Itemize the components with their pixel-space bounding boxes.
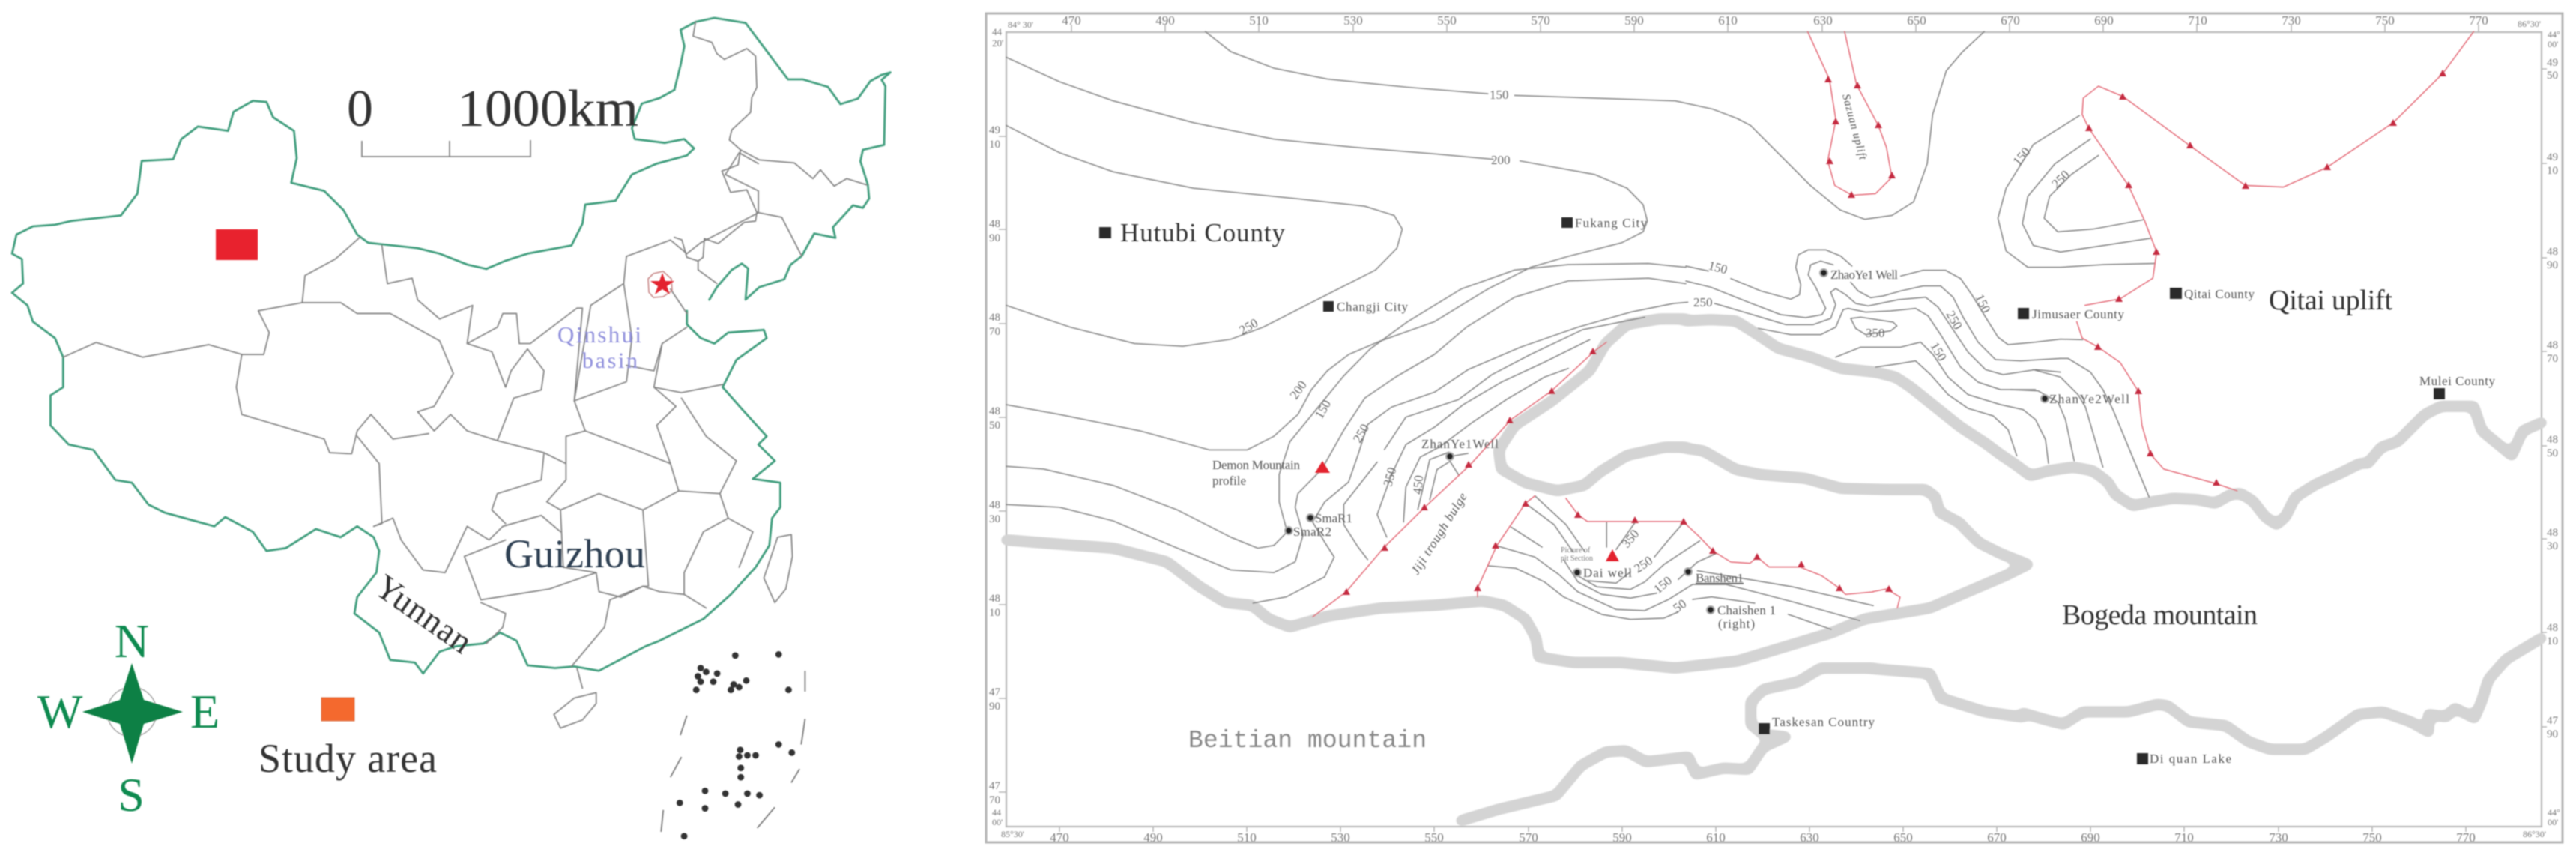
place labels: Sazuan uplift xyxy=(1839,93,1869,162)
map frame and axes: 47 xyxy=(989,686,1001,698)
place labels: Beitian mountain xyxy=(1188,727,1427,755)
map frame and axes: 750 xyxy=(2375,13,2395,28)
map frame and axes: 630 xyxy=(1800,830,1819,845)
contour lines xyxy=(1006,31,2154,629)
fault lines xyxy=(1313,31,2473,617)
place labels: Fukang City xyxy=(1575,216,1647,230)
map frame and axes: 470 xyxy=(1050,830,1069,845)
map frame and axes: 90 xyxy=(2547,728,2558,740)
scale bar xyxy=(347,80,638,157)
map frame and axes: 20' xyxy=(992,37,1003,49)
map frame and axes: 710 xyxy=(2174,830,2194,845)
place labels xyxy=(1120,93,2495,766)
panel: contour map xyxy=(986,13,2563,845)
study area marker: red rectangle xyxy=(216,229,258,260)
map frame and axes: 770 xyxy=(2469,13,2488,28)
contour value labels: 250 xyxy=(1631,553,1655,575)
map frame and axes: 48 xyxy=(2547,339,2558,351)
map frame and axes: 490 xyxy=(1155,13,1175,28)
place labels: (right) xyxy=(1718,617,1755,631)
map frame and axes: 70 xyxy=(2547,353,2558,365)
place labels: Bogeda mountain xyxy=(2062,599,2258,631)
map frame and axes: 90 xyxy=(989,232,1000,244)
place labels: Demon Mountain xyxy=(1212,458,1301,472)
place labels: Mulei County xyxy=(2419,374,2495,388)
map frame and axes: 30 xyxy=(2547,540,2558,552)
place labels: Changji City xyxy=(1337,300,1409,314)
label: Yunnan: Yunnan xyxy=(368,567,480,661)
place labels: Picture of xyxy=(1561,546,1591,555)
contour value labels: 150 xyxy=(2010,145,2033,169)
place labels: Chaishen 1 xyxy=(1717,603,1776,617)
map frame and axes: 50 xyxy=(2547,447,2558,459)
legend: study area: Study area xyxy=(258,736,437,781)
place labels: SmaR2 xyxy=(1293,525,1331,539)
legend: study area xyxy=(258,698,437,781)
map frame and axes: 48 xyxy=(2547,434,2558,446)
map frame and axes: 50 xyxy=(989,420,1000,432)
label: Qinshui basin: Qinshui xyxy=(557,321,641,348)
map frame and axes: 48 xyxy=(2547,246,2558,258)
map frame and axes: 47 xyxy=(989,780,1001,792)
icon: Beijing star xyxy=(648,271,674,297)
map frame and axes: 510 xyxy=(1237,830,1257,845)
map frame and axes: 48 xyxy=(989,593,1000,605)
map frame and axes: 70 xyxy=(989,326,1000,338)
map frame and axes: 590 xyxy=(1612,830,1632,845)
map frame and axes: 570 xyxy=(1519,830,1538,845)
map frame and axes: 86°30' xyxy=(2523,829,2546,839)
contour value labels: 150 xyxy=(1490,88,1509,102)
map frame and axes: 530 xyxy=(1331,830,1350,845)
fault teeth xyxy=(1343,70,2446,595)
label: basin: basin xyxy=(582,348,638,373)
map frame and axes: 550 xyxy=(1424,830,1444,845)
map frame and axes: 49 xyxy=(2547,151,2558,163)
map frame and axes: 610 xyxy=(1718,13,1738,28)
map frame and axes: 570 xyxy=(1531,13,1550,28)
place labels: Taskesan Country xyxy=(1772,715,1875,729)
map frame and axes: 690 xyxy=(2081,830,2100,845)
contour value labels: 250 xyxy=(1944,309,1965,332)
county square markers xyxy=(1099,217,2445,764)
map frame and axes: 85°30' xyxy=(1001,829,1024,839)
map frame and axes: 550 xyxy=(1437,13,1457,28)
scale bar: 1000km xyxy=(457,80,638,138)
map frame and axes: 10 xyxy=(2547,635,2558,647)
contour value labels: 150 xyxy=(1972,292,1993,315)
map frame and axes: 10 xyxy=(989,607,1000,619)
map frame and axes: 510 xyxy=(1249,13,1269,28)
label: Guizhou: Guizhou xyxy=(504,531,645,576)
map frame and axes: 48 xyxy=(2547,527,2558,539)
scale bar: 0 xyxy=(347,80,373,138)
map frame and axes: 710 xyxy=(2188,13,2207,28)
map frame and axes: 00' xyxy=(992,817,1003,827)
map frame and axes: 00' xyxy=(2548,39,2558,49)
place labels: profile xyxy=(1212,474,1246,488)
map frame and axes: 84° 30' xyxy=(1008,19,1033,30)
map frame and axes: 670 xyxy=(2001,13,2020,28)
place labels: ZhaoYe1 Well xyxy=(1830,268,1898,282)
contour value labels: 200 xyxy=(1287,378,1310,402)
map frame and axes: 730 xyxy=(2282,13,2301,28)
contour value labels: 50 xyxy=(1670,596,1689,615)
place labels: Dai well xyxy=(1583,566,1632,580)
place labels: ZhanYe2Well xyxy=(2049,392,2129,406)
map frame and axes: 10 xyxy=(2547,165,2558,177)
national border xyxy=(12,18,890,674)
contour value labels: 150 xyxy=(1707,259,1729,277)
map frame and axes: 650 xyxy=(1907,13,1926,28)
map frame and axes: 490 xyxy=(1143,830,1163,845)
map frame and axes: 00' xyxy=(2548,817,2558,827)
map frame and axes: 48 xyxy=(989,499,1000,511)
place labels: SmaR1 xyxy=(1315,511,1352,525)
map frame and axes: 610 xyxy=(1706,830,1726,845)
map frame and axes: 750 xyxy=(2362,830,2382,845)
place labels: Hutubi County xyxy=(1120,218,1286,247)
map frame and axes: 44° xyxy=(2548,807,2560,818)
map frame and axes: 50 xyxy=(2547,70,2558,82)
map frame and axes: 770 xyxy=(2456,830,2476,845)
map frame and axes: 10 xyxy=(989,139,1000,151)
contour value labels: 350 xyxy=(1866,326,1885,340)
map frame and axes xyxy=(986,13,2563,845)
map frame and axes: 670 xyxy=(1987,830,2007,845)
map frame and axes: 48 xyxy=(989,312,1000,324)
map frame and axes: 470 xyxy=(1062,13,1081,28)
contour value labels: 150 xyxy=(1312,397,1334,421)
contour value labels: 150 xyxy=(1928,340,1950,363)
map frame and axes: 690 xyxy=(2094,13,2114,28)
map frame and axes: 630 xyxy=(1813,13,1833,28)
map frame and axes: 90 xyxy=(2547,259,2558,271)
icon: compass rose: S xyxy=(118,768,145,821)
map frame and axes: 90 xyxy=(989,701,1000,713)
map frame and axes: 44° xyxy=(2548,29,2560,40)
place labels: Qitai County xyxy=(2184,287,2255,301)
map frame and axes: 650 xyxy=(1893,830,1913,845)
map frame and axes: 44 xyxy=(992,807,1001,818)
place labels: Qitai uplift xyxy=(2269,285,2392,316)
province boundaries xyxy=(63,22,867,728)
icon: compass rose: N xyxy=(115,614,149,668)
South China Sea inset: islands and dashed line xyxy=(661,651,805,839)
map frame and axes: 48 xyxy=(989,218,1000,230)
map frame and axes: 49 xyxy=(989,124,1000,136)
icon: compass rose xyxy=(37,614,220,821)
mountain outlines xyxy=(1006,319,2542,821)
panel: China location map xyxy=(12,18,890,839)
well markers xyxy=(1285,269,2049,614)
map frame and axes: 48 xyxy=(2547,622,2558,634)
place labels: pit Section xyxy=(1561,555,1593,563)
icon: compass rose: W xyxy=(37,685,83,738)
map frame and axes: 47 xyxy=(2547,715,2558,727)
contour value labels: 350 xyxy=(1381,465,1399,488)
place labels: Jimusaer County xyxy=(2032,307,2125,321)
contour value labels: 200 xyxy=(1491,153,1511,167)
map frame and axes: 86°30' xyxy=(2518,19,2541,29)
contour value labels: 250 xyxy=(2049,167,2072,191)
map frame and axes: 530 xyxy=(1343,13,1363,28)
place labels: Banshen1 xyxy=(1696,571,1744,585)
contour value labels: 350 xyxy=(1619,527,1642,551)
contour value labels: 450 xyxy=(1410,474,1426,495)
contour value labels: 250 xyxy=(1350,421,1372,445)
icon: compass rose: E xyxy=(190,685,220,738)
map frame and axes: 48 xyxy=(989,405,1000,417)
map frame and axes: 70 xyxy=(989,794,1000,806)
section triangles xyxy=(1315,461,1619,561)
place labels: Di quan Lake xyxy=(2150,752,2231,766)
map frame and axes: 30 xyxy=(989,513,1000,525)
contour value labels xyxy=(1236,88,2072,615)
contour value labels: 150 xyxy=(1651,573,1675,596)
map frame and axes: 730 xyxy=(2269,830,2288,845)
map frame and axes: 49 xyxy=(2547,57,2558,69)
contour value labels: 250 xyxy=(1693,295,1713,309)
map frame and axes: 44 xyxy=(992,26,1003,37)
place labels: Jiji trough bulge xyxy=(1408,490,1470,577)
contour value labels: 250 xyxy=(1236,315,1260,337)
map frame and axes: 590 xyxy=(1624,13,1644,28)
place labels: ZhanYe1Well xyxy=(1421,437,1499,451)
